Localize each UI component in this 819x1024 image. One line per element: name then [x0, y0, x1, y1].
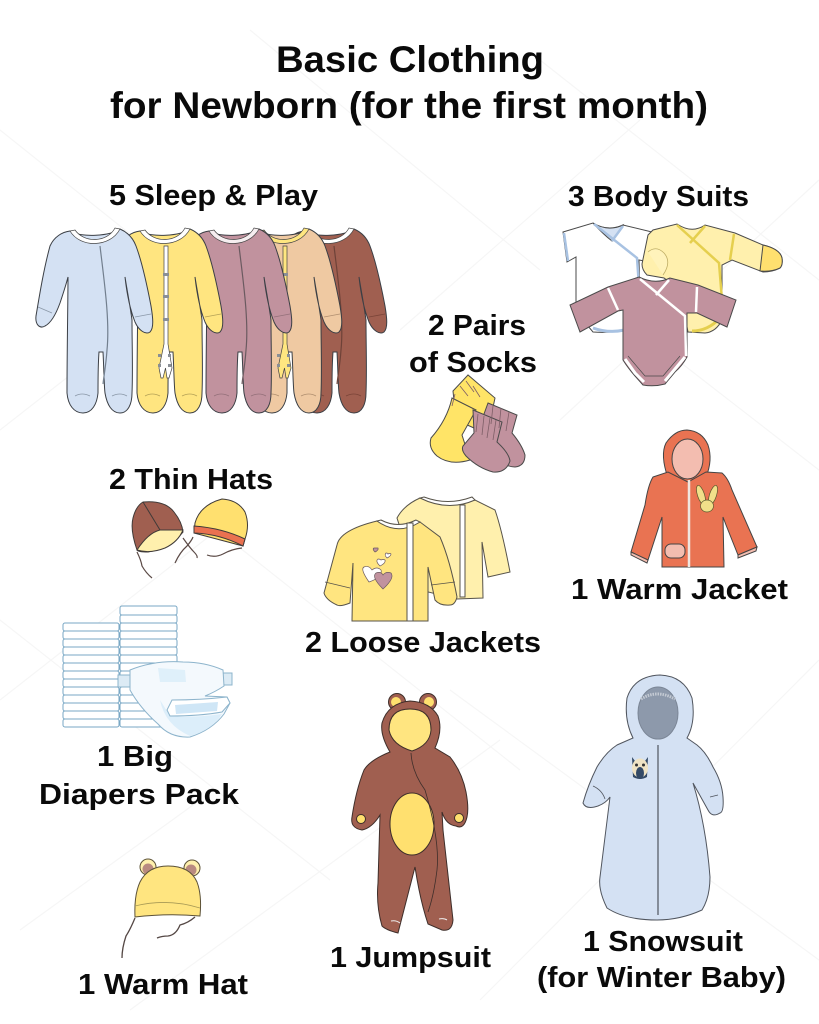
heading: 2 Thin Hats: 2 Thin Hats	[109, 464, 273, 496]
sleepsuit: yellow	[106, 228, 223, 413]
bear ears	[388, 694, 436, 710]
heading: 1 Big Diapers Pack: Diapers Pack	[39, 779, 240, 811]
sock: mauve back	[480, 403, 525, 467]
title: Basic Clothing	[276, 39, 544, 80]
sock: mauve front	[462, 410, 510, 472]
heading: 1 Snowsuit: 1 Snowsuit	[583, 926, 743, 958]
heading: 1 Big Diapers Pack	[39, 741, 240, 811]
bear body	[352, 701, 468, 933]
jacket: pale yellow back	[397, 497, 510, 599]
illustration: loose jackets	[324, 497, 510, 621]
heading: 1 Snowsuit	[537, 926, 786, 994]
heading: 3 Body Suits: 3 Body Suits	[568, 181, 749, 213]
illustration: warm hat with ears	[122, 859, 201, 958]
illustration: diapers pack	[63, 606, 232, 737]
heading: 2 Loose Jackets: 2 Loose Jackets	[305, 627, 541, 659]
snowsuit fur trim	[641, 694, 675, 699]
sleepsuit: brown	[270, 228, 387, 413]
heading: 1 Snowsuit: (for Winter Baby)	[537, 962, 786, 994]
illustration: thin hats	[132, 499, 248, 578]
hat: yellow with orange band	[194, 499, 248, 556]
hat dome	[135, 866, 201, 917]
sock: yellow back	[453, 375, 495, 428]
bear belly	[390, 793, 434, 855]
jacket zipper	[688, 480, 690, 567]
bear zip	[411, 753, 438, 912]
jacket face opening	[672, 439, 703, 479]
diaper stack	[63, 606, 177, 727]
heading: 1 Big Diapers Pack: 1 Big	[97, 741, 173, 773]
title	[110, 39, 708, 126]
jacket hood	[663, 430, 710, 490]
heading: 1 Jumpsuit: 1 Jumpsuit	[330, 942, 491, 974]
heading: 1 Warm Jacket: 1 Warm Jacket	[571, 574, 788, 606]
illustration: socks	[430, 375, 525, 472]
illustration: three body suits	[563, 223, 782, 386]
heading: 1 Warm Hat: 1 Warm Hat	[78, 969, 248, 1001]
sleepsuit: light blue	[36, 228, 153, 413]
bodysuit: yellow long sleeve	[642, 224, 782, 333]
bodysuit: mauve wrap	[570, 277, 736, 386]
owl badge	[632, 757, 648, 779]
heading: 2 Pairs of Socks	[409, 310, 537, 379]
illustration: five sleepsuits	[36, 228, 387, 413]
bear face opening	[389, 709, 431, 751]
heading: 2 Pairs of Socks: 2 Pairs	[428, 310, 526, 342]
hat strings	[122, 917, 195, 958]
jacket: yellow front	[324, 520, 457, 621]
heading: 2 Pairs of Socks: of Socks	[409, 347, 537, 379]
snowsuit body	[583, 675, 723, 920]
sleepsuit: peach	[225, 228, 342, 413]
illustration: warm jacket	[631, 430, 757, 567]
title: for Newborn (for the first month)	[110, 85, 708, 126]
hat ears	[140, 859, 200, 876]
diaper	[118, 662, 232, 737]
sleepsuit: mauve	[175, 228, 292, 413]
jacket body	[631, 472, 757, 567]
bunny badge	[695, 484, 719, 512]
bear hands	[356, 814, 366, 824]
jacket pocket	[665, 544, 685, 558]
snowsuit face opening	[638, 687, 678, 739]
hat: brown	[132, 502, 197, 578]
illustration: snowsuit	[583, 675, 723, 920]
hat brim line	[135, 902, 200, 908]
heading: 5 Sleep & Play: 5 Sleep & Play	[109, 180, 318, 212]
sock: yellow front	[430, 398, 476, 462]
bodysuit: white short sleeve	[563, 223, 652, 332]
illustration: bear jumpsuit	[352, 694, 468, 933]
hearts decoration	[363, 548, 392, 589]
snowsuit zipper	[657, 745, 659, 915]
